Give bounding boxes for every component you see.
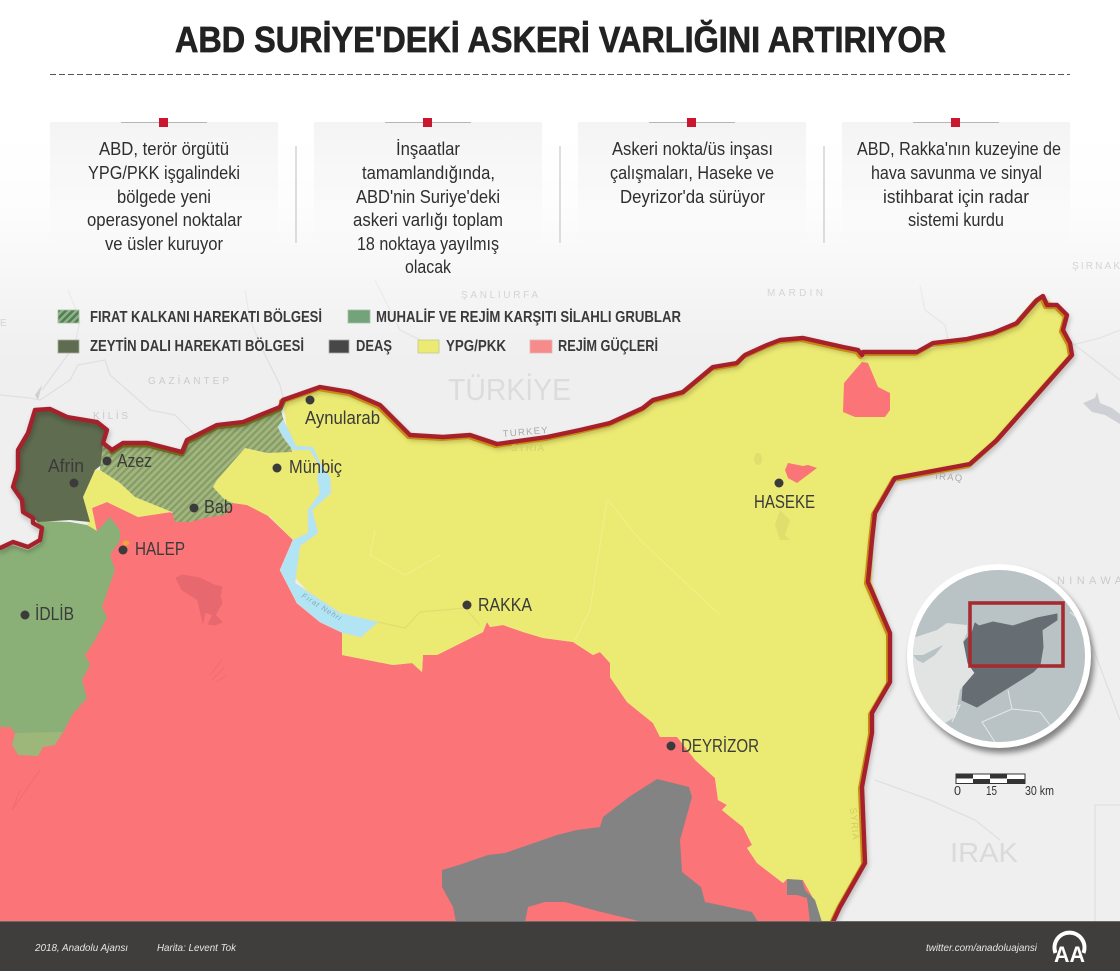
city: Halep: HALEP [135, 539, 185, 559]
seasonal lake / river traces near Haseke [754, 453, 790, 540]
Fırat Kalkanı operation zone [100, 407, 292, 522]
border labels: IRAQ [935, 471, 963, 484]
panel: card 4: sistemi kurdu [908, 210, 1004, 230]
DEAŞ areas [442, 779, 822, 922]
top white fade [0, 130, 1120, 360]
city: Azez: Azez [117, 451, 152, 471]
scale bar [954, 774, 1054, 798]
city: Aynularab [305, 396, 380, 428]
background place names: ŞIRNAK [1072, 261, 1120, 272]
city: Bab [190, 497, 233, 517]
background place names: KİLİS [93, 409, 128, 422]
panel: card 2: olacak [405, 257, 452, 277]
legend [58, 309, 681, 355]
panel: card 3: çalışmaları, Haseke ve [610, 163, 774, 183]
legend: regime: REJİM GÜÇLERİ [558, 338, 658, 355]
city: Aynularab: Aynularab [305, 408, 380, 428]
legend: Fırat Kalkanı: FIRAT KALKANI HAREKATI BÖLGESİ [90, 309, 322, 326]
city: Afrin: Afrin [48, 456, 84, 476]
background place names: GAZİANTEP [148, 374, 229, 387]
Zeytin Dalı operation zone [13, 409, 107, 522]
panel: card 3 [578, 118, 806, 252]
city: Azez [102, 451, 152, 471]
panel: card 4: ABD, Rakka'nın kuzeyine de [857, 139, 1061, 159]
city: Bab: Bab [204, 497, 233, 517]
legend: YPG/PKK: YPG/PKK [446, 338, 507, 355]
panel: card 4 [842, 118, 1070, 252]
background place names: ŞANLIURFA [461, 290, 538, 301]
lighter opposition patch [12, 732, 63, 756]
scale bar: 30 km [1025, 783, 1054, 798]
salt lake [176, 575, 222, 625]
territory: regime forces [0, 502, 825, 922]
panel: card 4: hava savunma ve sinyal [871, 163, 1042, 183]
panel: card 3: Askeri nokta/üs inşası [612, 139, 773, 159]
border labels: SYRIA [511, 443, 545, 454]
panel: card 2 [314, 118, 542, 277]
panel: card 1: operasyonel noktalar [87, 210, 242, 230]
border labels [300, 425, 963, 841]
title: ABD SURİYE'DEKİ ASKERİ VARLIĞINI ARTIRIYOR [175, 19, 946, 60]
icon: AA logo: AA [1054, 942, 1085, 967]
background place names: E [0, 318, 7, 329]
territory: YPG/PKK [83, 296, 1072, 922]
city: Afrin [48, 456, 84, 488]
inset locator map [905, 560, 1095, 755]
panel: card 2: 18 noktaya yayılmış [357, 234, 499, 254]
city: Halep [118, 539, 185, 559]
footer [0, 921, 1120, 971]
panel: card 1: ve üsler kuruyor [105, 234, 223, 254]
footer: Harita: Levent Tok [157, 942, 237, 954]
panel: card 1 [50, 118, 278, 254]
panel: card 1: bölgede yeni [117, 187, 211, 207]
border labels: SYRIA [847, 807, 861, 841]
small orange mark near Halep [122, 540, 130, 546]
border labels: Fırat Nehri [300, 591, 343, 623]
panel: card 1: YPG/PKK işgalindeki [88, 163, 240, 183]
background place names [0, 261, 1120, 868]
legend: YPG/PKK [418, 338, 507, 355]
panel: card 2: askeri varlığı toplam [353, 210, 503, 230]
panel: card 2: tamamlandığında, [362, 163, 495, 183]
background place names: MARDIN [767, 288, 823, 299]
city: Rakka: RAKKA [478, 595, 532, 615]
panel: card 3: Deyrizor'da sürüyor [620, 187, 765, 207]
legend: DEAŞ [329, 338, 392, 355]
faint relief marks [12, 660, 226, 810]
legend: DEAŞ: DEAŞ [356, 338, 392, 355]
city labels and markers [20, 396, 815, 756]
city: Haseke: HASEKE [754, 492, 815, 512]
legend: regime [530, 338, 658, 355]
panel: card 1: ABD, terör örgütü [99, 139, 229, 159]
footer: 2018, Anadolu Ajansı [34, 942, 128, 954]
city: Münbiç: Münbiç [289, 457, 342, 477]
Turkey-Syria-Iraq border [0, 296, 1073, 925]
background place names: IRAK [950, 837, 1018, 868]
city: İdlib [20, 604, 74, 624]
city: Haseke [754, 478, 815, 512]
yellow faint lines [370, 500, 720, 640]
scale bar: 15 [986, 783, 997, 798]
city: Deyrizor: DEYRİZOR [681, 736, 759, 756]
scale bar: 0 [954, 783, 961, 798]
city: İdlib: İDLİB [35, 604, 74, 624]
legend: opposition: MUHALİF VE REJİM KARŞITI SİLAHLI GRUBLAR [376, 309, 681, 326]
territory: opposition groups [0, 517, 120, 733]
legend: Zeytin Dalı: ZEYTİN DALI HAREKATI BÖLGESİ [90, 338, 304, 355]
panel: card 2: ABD'nin Suriye'deki [356, 187, 500, 207]
panel: card 4: istihbarat için radar [883, 187, 1029, 207]
background place names: TÜRKİYE [448, 372, 571, 407]
panel: card 2: İnşaatlar [396, 139, 460, 159]
footer: twitter.com/anadoluajansi [926, 942, 1038, 954]
border labels: TURKEY [502, 425, 549, 440]
Fırat river [278, 420, 378, 637]
isolated regime pockets [785, 362, 890, 483]
